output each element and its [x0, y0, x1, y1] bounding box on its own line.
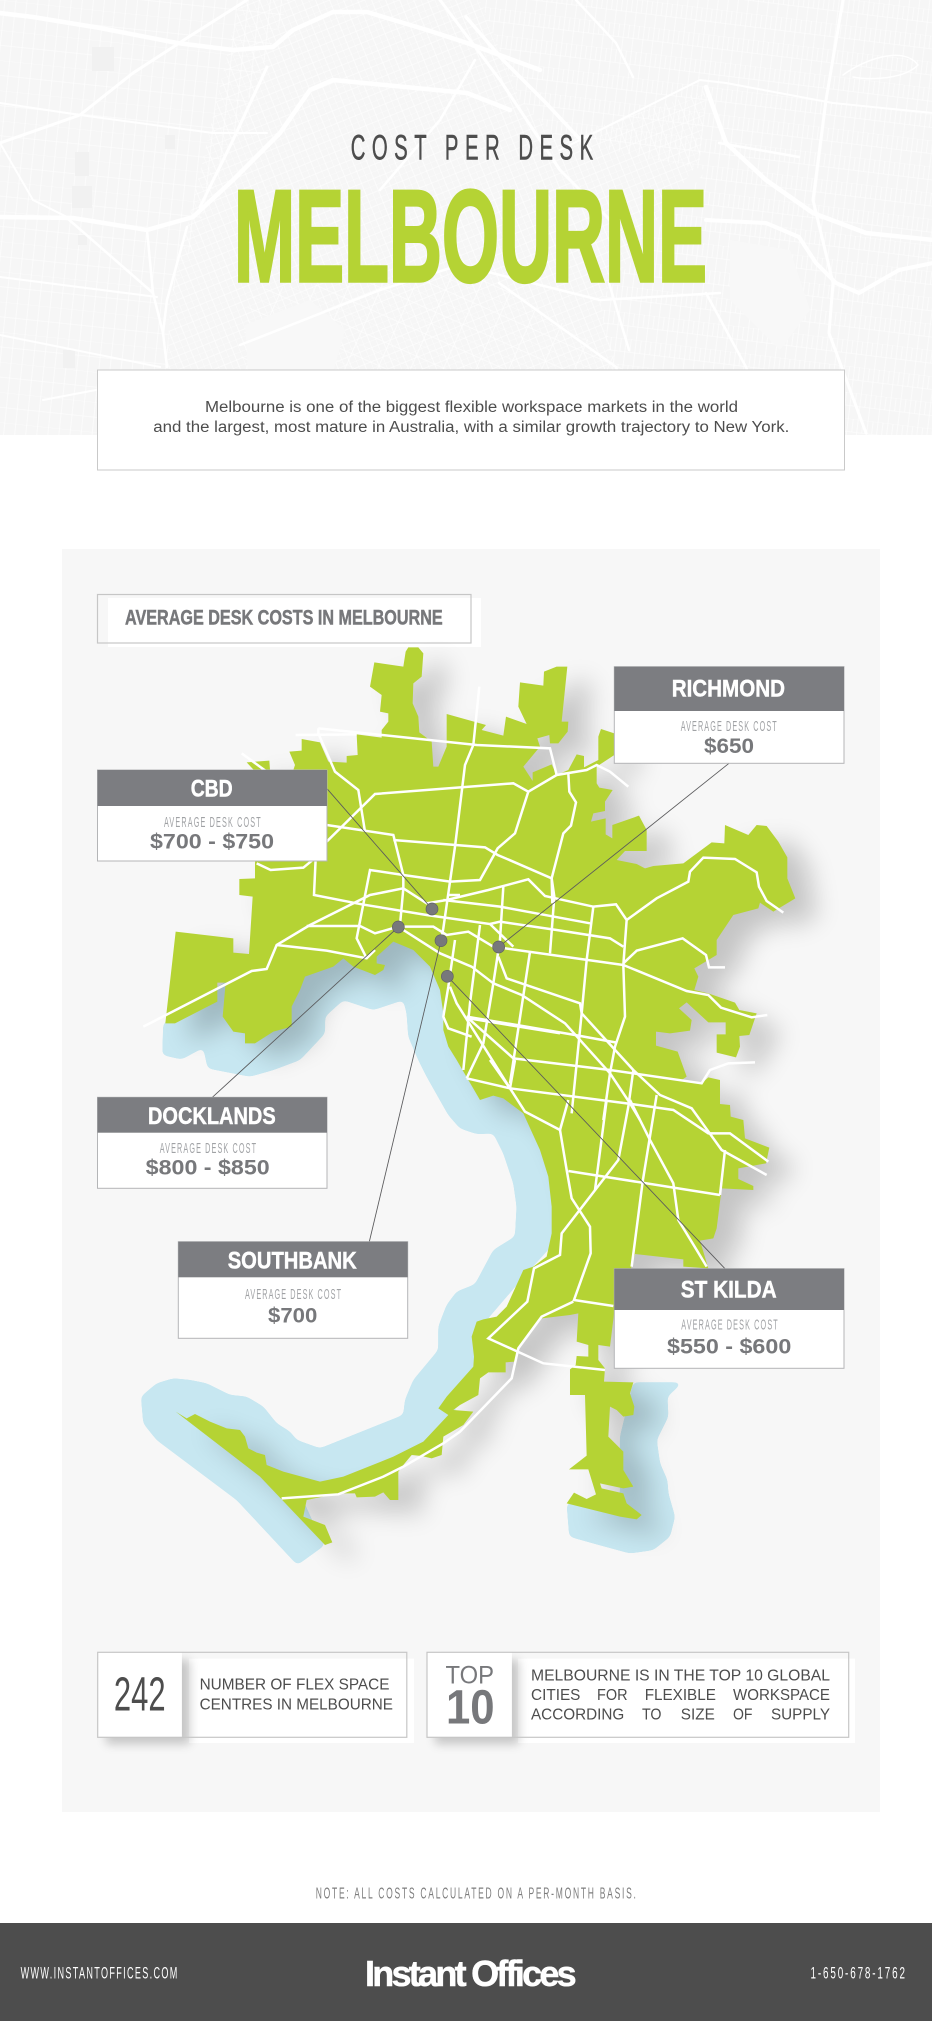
stat: top 10 global cities: FLEXIBLE: [645, 1687, 716, 1704]
card: Docklands: DOCKLANDS: [148, 1103, 276, 1130]
card: Richmond: [614, 667, 844, 763]
footnote: NOTE: ALL COSTS CALCULATED ON A PER-MONTH BASIS.: [316, 1885, 636, 1902]
roads: [143, 687, 783, 1498]
card: Richmond: $650: [704, 735, 754, 758]
card: Southbank: AVERAGE DESK COST: [245, 1288, 341, 1303]
intro text box: Melbourne is one of the biggest flexible workspace markets in the world: [205, 399, 738, 416]
stat: top 10 global cities: [427, 1652, 855, 1744]
stat: 242 flex space centres: CENTRES IN MELBOURNE: [200, 1696, 393, 1713]
card: Docklands: $800 - $850: [146, 1157, 270, 1180]
card: CBD: [98, 770, 327, 861]
card: Docklands: [98, 1097, 327, 1188]
land shadow: [189, 662, 819, 1560]
footer bar: [0, 1923, 932, 2021]
panel: map background: [62, 549, 880, 1812]
land: [165, 647, 795, 1545]
logo wordmark: Instant Offices: [365, 1953, 577, 1994]
heading: average desk costs: AVERAGE DESK COSTS IN MELBOURNE: [125, 606, 443, 629]
stat: top 10 global cities: 10: [446, 1681, 495, 1734]
stat: top 10 global cities: ACCORDING: [531, 1707, 624, 1724]
leader lines: [212, 763, 729, 1269]
card: Southbank: [178, 1242, 408, 1338]
card: Southbank: SOUTHBANK: [228, 1248, 357, 1275]
card: St Kilda: ST KILDA: [681, 1276, 777, 1303]
intro text box: and the largest, most mature in Australia, with a similar growth trajectory to New York.: [153, 419, 789, 436]
card: CBD: AVERAGE DESK COST: [164, 816, 261, 831]
card: CBD: CBD: [191, 776, 233, 803]
stat: top 10 global cities: TOP: [446, 1662, 494, 1690]
location markers: [392, 903, 505, 982]
card: Richmond: AVERAGE DESK COST: [681, 720, 777, 735]
stat: 242 flex space centres: 242: [114, 1669, 166, 1722]
intro text box: [98, 370, 844, 470]
card: Richmond: RICHMOND: [672, 675, 785, 702]
stat: top 10 global cities: TO: [642, 1707, 662, 1724]
hero map background: [0, 0, 932, 435]
map of Melbourne: [141, 647, 819, 1565]
stat: top 10 global cities: SIZE: [681, 1707, 715, 1724]
stat: top 10 global cities: MELBOURNE IS IN THE TOP 10 GLOBAL: [531, 1667, 830, 1684]
website: WWW.INSTANTOFFICES.COM: [21, 1964, 177, 1982]
water: south bay: [567, 1382, 683, 1553]
card: St Kilda: [614, 1269, 844, 1368]
title kicker: COST PER DESK: [351, 129, 593, 168]
card: CBD: $700 - $750: [150, 830, 274, 854]
card: Docklands: AVERAGE DESK COST: [160, 1142, 256, 1157]
card: Southbank: $700: [268, 1304, 317, 1327]
water: bay: [141, 937, 560, 1565]
stat: top 10 global cities: OF: [733, 1707, 752, 1724]
stat: top 10 global cities: WORKSPACE: [733, 1687, 830, 1704]
stat: 242 flex space centres: [98, 1652, 414, 1744]
stat: 242 flex space centres: NUMBER OF FLEX SPACE: [200, 1676, 390, 1693]
stat: top 10 global cities: FOR: [597, 1687, 628, 1704]
heading: average desk costs: [98, 594, 481, 647]
stat: top 10 global cities: SUPPLY: [771, 1707, 830, 1724]
card: St Kilda: AVERAGE DESK COST: [681, 1318, 778, 1333]
phone: 1-650-678-1762: [810, 1964, 905, 1982]
stat: top 10 global cities: CITIES: [531, 1687, 580, 1704]
card: St Kilda: $550 - $600: [667, 1336, 791, 1359]
